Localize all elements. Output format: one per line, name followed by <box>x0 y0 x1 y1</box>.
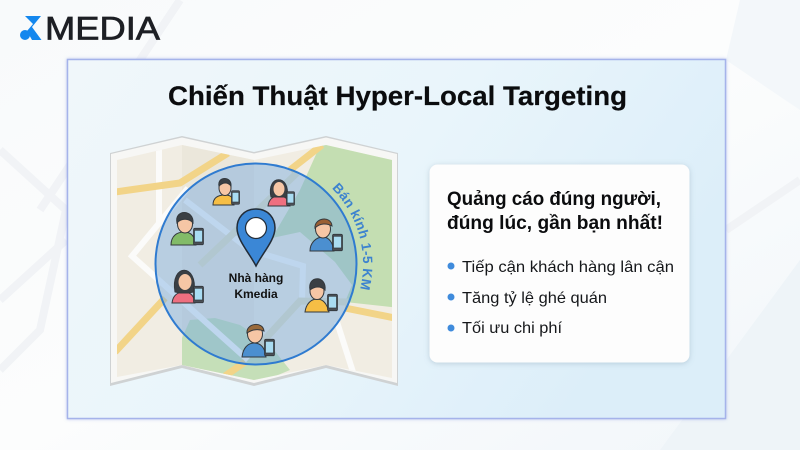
radius label <box>332 188 363 292</box>
person: left green <box>171 212 203 245</box>
map <box>110 136 400 391</box>
person: right yellow <box>305 279 337 312</box>
logo wordmark: MEDIA <box>45 10 161 46</box>
yellow roads <box>115 145 395 376</box>
icon: logo mark <box>20 16 42 40</box>
logo: KMEDIA <box>20 10 161 46</box>
bullet list <box>448 259 674 337</box>
grey-green road <box>200 173 348 350</box>
bullet 1: Tiếp cận khách hàng lân cận <box>462 259 674 276</box>
info card <box>430 164 690 362</box>
map surface <box>117 145 392 380</box>
park areas <box>274 145 392 308</box>
pin label <box>229 271 283 301</box>
card heading: Quảng cáo đúng người, <box>447 189 661 210</box>
bullet 3: Tối ưu chi phí <box>462 320 563 337</box>
radius circle <box>156 164 356 364</box>
person: left pink <box>172 270 203 303</box>
person: bottom blue <box>242 324 274 357</box>
pin label: Nhà hàng <box>229 271 283 285</box>
panel: main card <box>68 60 726 418</box>
person: top yellow <box>213 178 240 205</box>
map paper frame <box>110 136 398 386</box>
text: Bán kính 1-5 KM <box>332 182 372 290</box>
white roads <box>132 148 353 372</box>
person: top pink <box>268 180 295 206</box>
bullet 2: Tăng tỷ lệ ghé quán <box>462 290 607 307</box>
title: Chiến Thuật Hyper-Local Targeting <box>168 81 627 111</box>
pin label: Kmedia <box>234 287 278 301</box>
card heading: đúng lúc, gần bạn nhất! <box>447 213 663 234</box>
person: right blue <box>310 219 342 251</box>
icon: location pin <box>237 209 275 266</box>
card heading <box>447 189 663 234</box>
